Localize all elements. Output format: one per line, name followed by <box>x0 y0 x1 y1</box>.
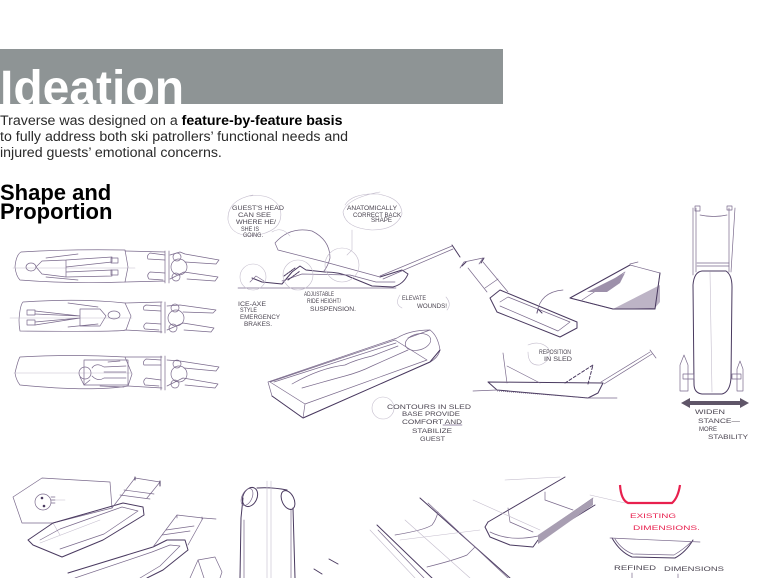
callout: back shape: SHAPE <box>371 218 392 224</box>
sketch: sled end close-up <box>473 477 625 547</box>
intro text <box>0 113 348 161</box>
arrow: stance width <box>681 398 749 408</box>
callout: back shape: ANATOMICALLY <box>347 206 397 212</box>
sketch: contoured sled base <box>268 330 472 443</box>
sketch: existing dimensions in red <box>620 485 701 532</box>
callout: reposition in sled <box>528 343 573 365</box>
note: widen stance <box>695 410 748 441</box>
intro text: Traverse was designed on a feature-by-feature basis <box>0 113 342 129</box>
note: widen stance: STABILITY <box>708 435 748 441</box>
note: adjustable ride height: SUSPENSION. <box>310 307 356 313</box>
sketch: side sled reposition <box>473 343 656 398</box>
note: elevate wounds: ELEVATE <box>402 296 426 302</box>
note: widen stance: WIDEN <box>695 410 725 416</box>
intro text: injured guests’ emotional concerns. <box>0 145 222 161</box>
callout: contours note: STABILIZE <box>412 429 452 435</box>
note: adjustable ride height: ADJUSTABLE <box>304 292 334 298</box>
sketch: top view sled with guest head first <box>13 250 219 283</box>
callout: head visibility: GOING. <box>243 233 263 239</box>
callout: head visibility: CAN SEE <box>238 213 271 219</box>
sketch: refined dimensions: DIMENSIONS <box>664 567 724 573</box>
section heading: Shape and <box>0 180 111 205</box>
note: elevate wounds <box>397 295 449 310</box>
note: emergency brakes: ICE-AXE <box>238 302 266 308</box>
note: emergency brakes: STYLE <box>240 308 257 314</box>
note: adjustable ride height <box>304 292 356 313</box>
callout: contours note: GUEST <box>420 437 445 443</box>
note: elevate wounds: WOUNDS! <box>417 304 447 310</box>
sketch: tall sled front view <box>239 481 338 578</box>
sketch: top view widened stance <box>680 206 749 441</box>
sketch: side view sled with annotations <box>228 192 460 328</box>
sketch: sled with open lid <box>13 477 160 557</box>
callout: contours note <box>372 397 472 443</box>
sketch: top view sled with guest seated <box>14 356 219 390</box>
note: emergency brakes: EMERGENCY <box>240 315 280 321</box>
sketch: wedge sled end <box>570 262 660 309</box>
sketch: second sled perspective <box>68 515 222 578</box>
callout: head visibility <box>228 195 290 239</box>
note: widen stance: MORE <box>699 427 717 433</box>
callout: back shape <box>343 192 402 255</box>
callout: reposition in sled: REPOSITION <box>539 350 571 356</box>
note: emergency brakes: BRAKES. <box>244 322 272 328</box>
callout: contours note: CONTOURS IN SLED <box>387 405 472 411</box>
callout: back shape: CORRECT BACK <box>353 213 401 219</box>
title banner <box>0 49 503 104</box>
sketch: refined dimensions: REFINED <box>614 566 657 572</box>
sketch: refined dimensions <box>610 538 724 578</box>
callout: contours note: COMFORT AND <box>402 420 463 426</box>
note: widen stance: STANCE— <box>698 419 740 425</box>
sketch: long sled close-up <box>370 498 510 578</box>
callout: head visibility: SHE IS <box>241 227 259 233</box>
callout: head visibility: WHERE HE/ <box>236 220 276 226</box>
note: adjustable ride height: RIDE HEIGHT/ <box>307 299 341 305</box>
sketch: existing dimensions in red: DIMENSIONS. <box>633 526 701 532</box>
note: emergency brakes <box>238 302 280 328</box>
callout: reposition in sled: IN SLED <box>544 357 573 363</box>
callout: contours note: BASE PROVIDE <box>402 412 460 418</box>
sketch: existing dimensions in red: EXISTING <box>630 514 677 520</box>
section heading <box>0 180 112 224</box>
intro text: to fully address both ski patrollers’ functional needs and <box>0 129 348 145</box>
callout: head visibility: GUEST'S HEAD <box>232 206 285 212</box>
sketch: top view sled with guest feet first <box>10 300 216 333</box>
section heading: Proportion <box>0 199 112 224</box>
sketch: rotating sled perspective <box>460 258 577 337</box>
